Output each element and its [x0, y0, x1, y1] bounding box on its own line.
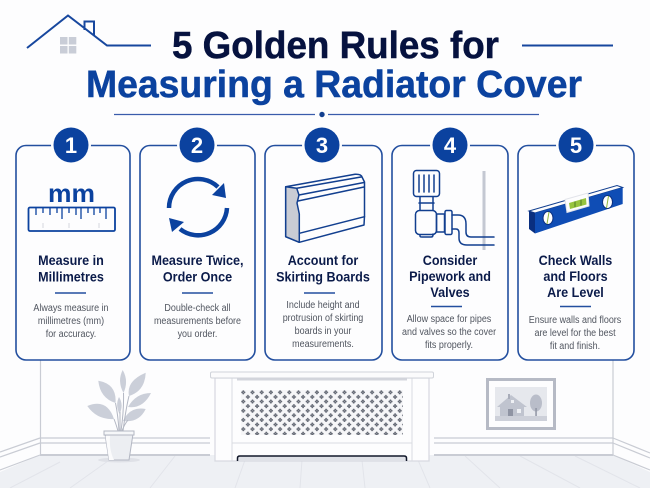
body text: Allow space for pipes: [407, 313, 491, 325]
pot: [98, 431, 140, 462]
body text: measurements before: [154, 315, 241, 327]
body text: are level for the best: [534, 327, 616, 339]
heading: [539, 252, 612, 300]
body text: millimetres (mm): [38, 315, 104, 327]
body text: Double-check all: [164, 302, 231, 314]
badge 4: 4: [444, 133, 457, 158]
top shelf: [210, 372, 434, 378]
heading: Valves: [430, 284, 470, 300]
badge 5: 5: [570, 133, 582, 158]
badge 2: 2: [191, 133, 203, 158]
body text: Ensure walls and floors: [529, 314, 621, 326]
panel: rule 3: [265, 125, 382, 360]
house window: [60, 37, 76, 54]
heading: Order Once: [163, 269, 232, 285]
heading: Consider: [423, 252, 477, 268]
leaves: [87, 370, 151, 431]
room scene: [0, 360, 650, 488]
floor: [0, 455, 650, 488]
badge 1: 1: [65, 133, 77, 158]
heading: [276, 252, 370, 285]
heading: Are Level: [547, 284, 604, 300]
lattice grille: [241, 390, 403, 435]
body text: protrusion of skirting: [283, 312, 363, 324]
body text: measurements.: [292, 338, 354, 350]
title: Measuring a Radiator Cover: [86, 64, 582, 106]
plant: [87, 370, 151, 462]
badge 4: [430, 125, 470, 165]
panel: rule 5: [518, 125, 634, 360]
icon: valve and pipe: [414, 170, 494, 250]
body text: boards in your: [295, 325, 352, 337]
badge 3: 3: [316, 133, 328, 158]
framed picture: [488, 380, 554, 428]
heading: Skirting Boards: [276, 269, 370, 285]
heading: Pipework and: [409, 268, 491, 284]
icon: spirit level: [529, 186, 623, 234]
title divider: [114, 112, 539, 117]
icon: mm ruler: [28, 180, 115, 231]
heading: Measure Twice,: [151, 252, 244, 268]
heading: Account for: [288, 252, 358, 268]
radiator cover: [210, 372, 434, 461]
body text: [283, 299, 363, 350]
header right rule: [522, 44, 613, 46]
heading: Millimetres: [38, 269, 104, 285]
badge 5: [556, 125, 596, 165]
heading: [409, 252, 491, 300]
title: [86, 25, 582, 106]
badge 1: [51, 125, 91, 165]
picture house: [497, 394, 527, 416]
body text: Include height and: [286, 299, 360, 311]
badge 2: [177, 125, 217, 165]
heading: Measure in: [38, 252, 104, 268]
panel: rule 4: [392, 125, 508, 360]
icon: mm ruler: mm: [48, 180, 95, 208]
body text: you order.: [178, 328, 217, 340]
panel: rule 1: [16, 125, 130, 360]
picture tree: [530, 394, 542, 416]
body text: fits properly.: [425, 339, 473, 351]
body text: [33, 302, 109, 340]
badge 3: [302, 125, 342, 165]
body text: for accuracy.: [46, 328, 96, 340]
body text: [402, 313, 497, 351]
heading: and Floors: [543, 268, 608, 284]
body text: fit and finish.: [550, 340, 600, 352]
body text: Always measure in: [33, 302, 109, 314]
body text: [154, 302, 241, 340]
icon: refresh arrows: [169, 179, 227, 235]
heading: [38, 252, 104, 285]
heading: Check Walls: [539, 252, 612, 268]
walls and skirting: [0, 360, 650, 470]
icon: skirting board: [286, 174, 364, 242]
body text: and valves so the cover: [402, 326, 497, 338]
body text: [529, 314, 621, 352]
heading: [151, 252, 244, 285]
panel: rule 2: [140, 125, 255, 360]
bottom opening: [237, 456, 407, 461]
header house logo: [27, 16, 151, 54]
title: 5 Golden Rules for: [172, 25, 499, 67]
